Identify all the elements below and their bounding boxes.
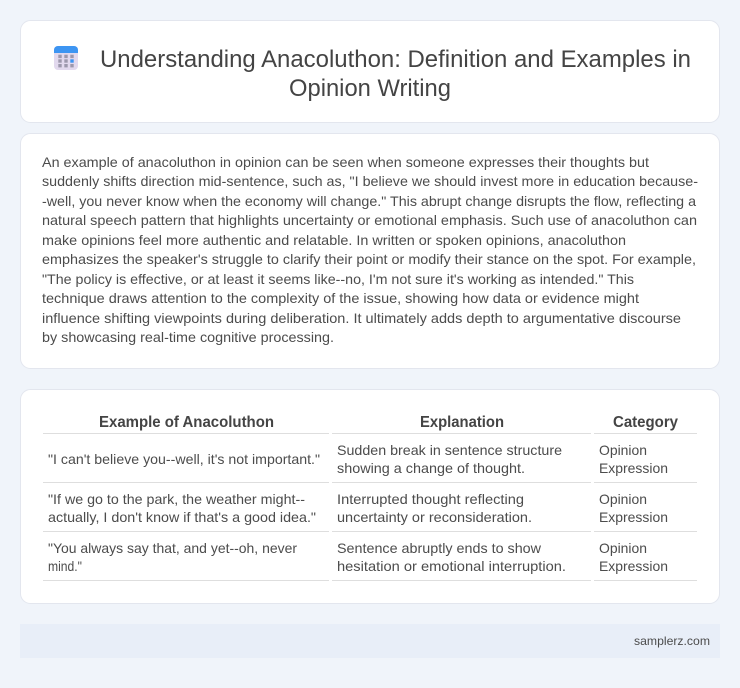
- table row 1: showing a change of thought.: [337, 460, 525, 476]
- table row 3: "You always say that, and yet--oh, never: [48, 540, 297, 556]
- table header: Explanation: [420, 414, 504, 431]
- table row 2: actually, I don't know if that's a good idea.": [48, 509, 316, 525]
- panel: intro paragraph card: [20, 134, 720, 368]
- panel: table card: [20, 390, 720, 604]
- paragraph text: by showcasing real-time cognitive processing.: [42, 329, 334, 345]
- paragraph text: suddenly shifts direction mid-sentence, such as, "I believe we should invest more in education because-: [42, 173, 698, 189]
- footer bar: samplerz.com: [634, 634, 710, 648]
- table row 1: [43, 442, 697, 483]
- title: [100, 46, 691, 102]
- paragraph text: emphasizes the speaker's struggle to clarify their point or modify their stance on the spot. For example,: [42, 251, 696, 267]
- paragraph text: [42, 154, 698, 345]
- table row 1: Expression: [599, 460, 668, 476]
- table row 1: Sudden break in sentence structure: [337, 442, 562, 458]
- table row 2: Interrupted thought reflecting: [337, 491, 524, 507]
- table row 3: Expression: [599, 558, 668, 574]
- icon: calendar: [54, 46, 78, 70]
- table row 2: [43, 491, 697, 532]
- paragraph text: "The policy is effective, or at least it seems like--no, I'm not sure it's working as intended." This: [42, 271, 634, 287]
- table row 2: uncertainty or reconsideration.: [337, 509, 532, 525]
- panel: title card: [20, 20, 720, 122]
- paragraph text: influence shifting viewpoints during deliberation. It ultimately adds depth to argumentative discourse: [42, 310, 681, 326]
- table row 2: Expression: [599, 509, 668, 525]
- table row 2: Opinion: [599, 491, 647, 507]
- table row 3: hesitation or emotional interruption.: [337, 558, 566, 574]
- title: Understanding Anacoluthon: Definition and Examples in: [100, 46, 691, 73]
- table header: [43, 414, 697, 434]
- paragraph text: make opinions feel more authentic and relatable. In written or spoken opinions, anacoluthon: [42, 232, 626, 248]
- footer bar: [20, 624, 720, 658]
- table row 3: mind.": [48, 558, 82, 574]
- paragraph text: technique draws attention to the complexity of the issue, showing how data or evidence might: [42, 290, 639, 306]
- table row 1: "I can't believe you--well, it's not important.": [48, 451, 320, 467]
- table header: Category: [613, 414, 678, 431]
- table row 3: [43, 540, 697, 581]
- paragraph text: natural speech pattern that highlights uncertainty or emotional emphasis. Such use of anacoluthon can: [42, 212, 697, 228]
- table row 3: Sentence abruptly ends to show: [337, 540, 542, 556]
- paragraph text: -well, you never know when the economy will change." This abrupt change disrupts the flow, reflecting a: [42, 193, 696, 209]
- table row 1: Opinion: [599, 442, 647, 458]
- table header: Example of Anacoluthon: [99, 414, 274, 431]
- paragraph text: An example of anacoluthon in opinion can be seen when someone expresses their thoughts but: [42, 154, 649, 170]
- title: Opinion Writing: [289, 75, 451, 102]
- table row 2: "If we go to the park, the weather might--: [48, 491, 305, 507]
- table row 3: Opinion: [599, 540, 647, 556]
